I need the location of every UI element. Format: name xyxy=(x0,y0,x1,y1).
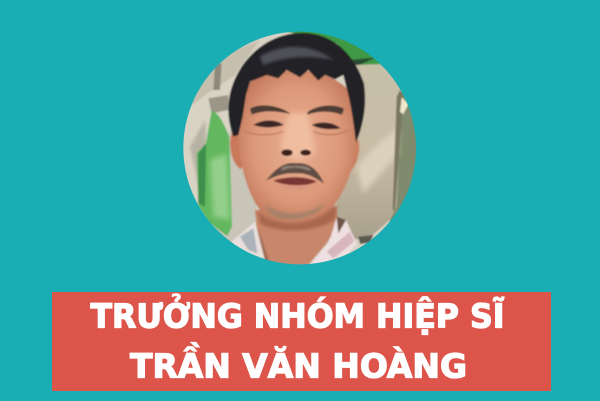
shirt xyxy=(230,217,357,267)
canvas sheet xyxy=(330,64,402,240)
wall stains and hook xyxy=(190,40,260,107)
jaw shadow xyxy=(257,203,337,230)
green plastic bag xyxy=(197,111,232,236)
chin stubble xyxy=(265,203,324,219)
mouth xyxy=(273,177,317,185)
green awning xyxy=(287,32,381,66)
wall behind xyxy=(183,32,399,264)
cheek folds xyxy=(245,130,348,135)
portrait photo xyxy=(180,30,423,267)
small dark object xyxy=(358,235,373,244)
title banner xyxy=(52,292,551,391)
face xyxy=(238,70,356,223)
eyes xyxy=(253,120,284,127)
ears xyxy=(229,132,243,170)
hair xyxy=(228,33,365,143)
nose shading xyxy=(282,113,315,159)
title line 1: TRƯỞNG NHÓM HIỆP SĨ xyxy=(90,292,504,336)
title line 2: TRẦN VĂN HOÀNG xyxy=(130,342,467,386)
moustache xyxy=(266,163,324,184)
eyebrows xyxy=(250,105,291,115)
infographic card xyxy=(52,32,551,391)
nostrils xyxy=(281,149,293,156)
right shade xyxy=(389,90,416,222)
neck xyxy=(255,207,338,265)
